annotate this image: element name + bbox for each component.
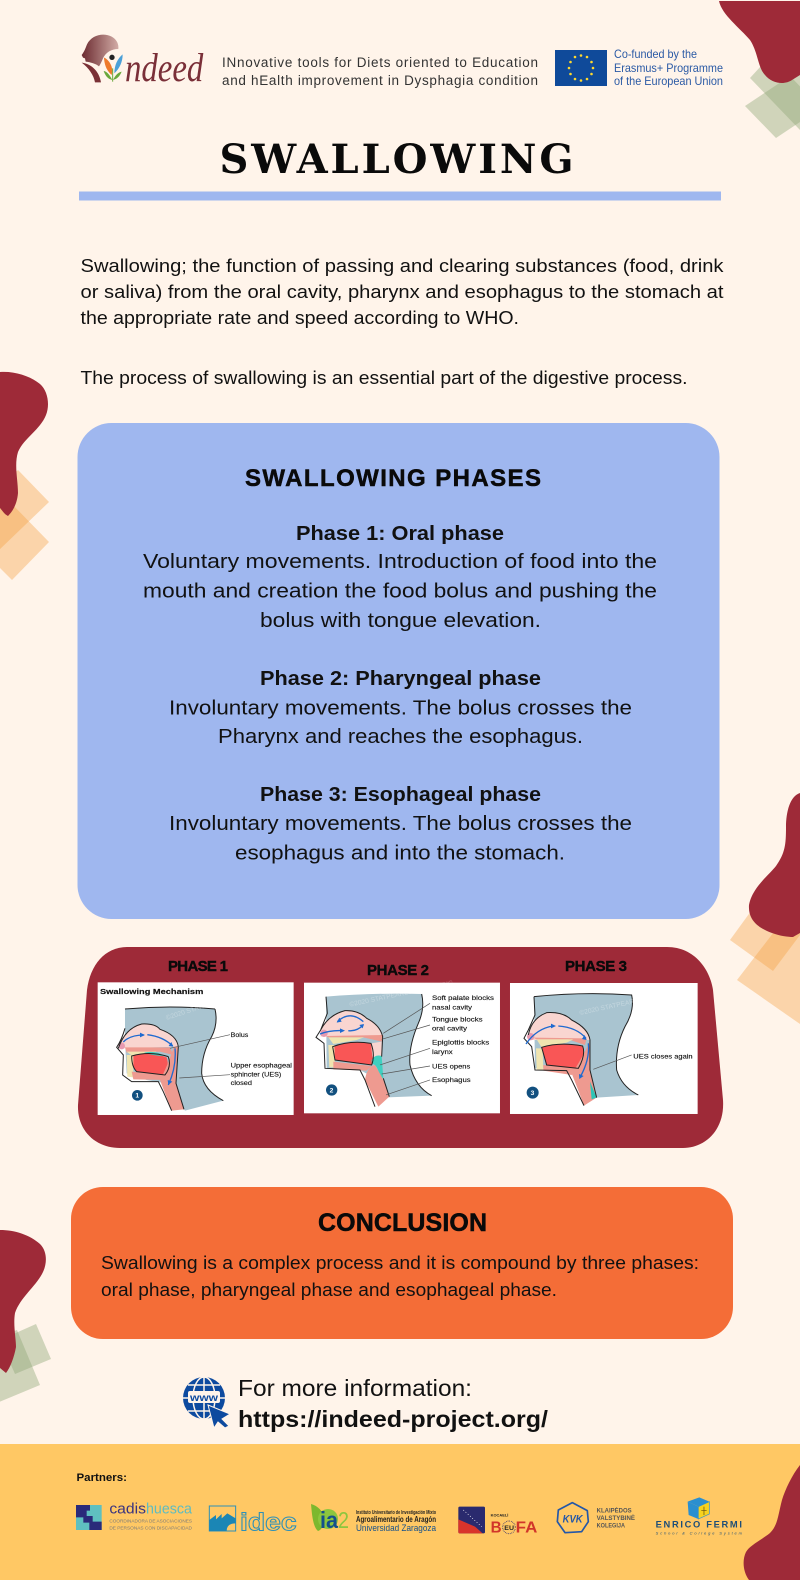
EU co-funding text (614, 47, 723, 88)
footer band (0, 1444, 800, 1580)
diagram: phase 3 swallowing mechanism: ©2020 STATPEARLS PUBLISHING (579, 987, 684, 1017)
EU co-funding text: of the European Union (614, 74, 723, 88)
partner logo: KVK (557, 1503, 635, 1533)
phase 2 text: Involuntary movements. The bolus crosses the (169, 696, 632, 720)
panel: phase illustrations (78, 947, 723, 1148)
label: phase 1: PHASE 1 (168, 958, 228, 975)
conclusion text (101, 1252, 699, 1300)
EU flag icon (555, 50, 607, 86)
partner logo: Kocaeli BEUFA: KOCAELİ (491, 1513, 508, 1518)
phase 1 text: Phase 1: Oral phase (296, 522, 504, 545)
phase 2 text: Phase 2: Pharyngeal phase (260, 667, 541, 690)
panel: conclusion (71, 1187, 733, 1339)
partner logo: KVK: KOLEGIJA (597, 1523, 626, 1529)
diagram: phase 1 swallowing mechanism: sphincter (UES) (231, 1071, 281, 1078)
phase 1 text (143, 522, 657, 632)
partner logo: cadis huesca: cadis (109, 1501, 146, 1517)
diagram: phase 2 swallowing mechanism: Esophagus (432, 1077, 471, 1084)
partner logo: Kocaeli BEUFA: EU (504, 1525, 514, 1532)
partner logo: Enrico Fermi: School & College System (656, 1531, 743, 1536)
conclusion text: Swallowing is a complex process and it is compound by three phases: (101, 1252, 699, 1273)
diagram: phase 1 swallowing mechanism: ©2020 STATPEARLS PUBLISHING (165, 982, 268, 1022)
icon: globe with cursor (183, 1377, 230, 1428)
partner logo: cadis huesca (76, 1501, 193, 1531)
more information text: https://indeed-project.org/ (238, 1406, 549, 1432)
intro text: or saliva) from the oral cavity, pharynx and esophagus to the stomach at (80, 281, 724, 302)
diagram: phase 2 swallowing mechanism: Tongue blocks (432, 1016, 483, 1023)
project tagline: INnovative tools for Diets oriented to Education (222, 55, 538, 70)
diagram: phase 1 swallowing mechanism: Swallowing Mechanism (100, 987, 204, 996)
label: phase 3: PHASE 3 (565, 958, 627, 975)
EU co-funding text: Co-funded by the (614, 47, 697, 61)
phase 1 text: mouth and creation the food bolus and pushing the (143, 580, 657, 602)
diagram: phase 2 swallowing mechanism: oral cavity (432, 1026, 468, 1033)
decoration: lower left blob and green rectangles (0, 1230, 51, 1410)
panel: swallowing phases (78, 423, 720, 919)
diagram: phase 1 swallowing mechanism (98, 982, 294, 1115)
partner logo: cadis huesca: COORDINADORA DE ASOCIACIONES (109, 1518, 192, 1523)
partner logo: KVK: KLAIPĖDOS (597, 1508, 632, 1515)
diagram: phase 2 swallowing mechanism: UES opens (432, 1064, 471, 1071)
diagram: phase 1 swallowing mechanism: closed (231, 1080, 252, 1087)
partner logo: Enrico Fermi (656, 1497, 743, 1536)
project tagline (222, 55, 538, 88)
intro text: Swallowing; the function of passing and clearing substances (food, drink (80, 255, 724, 276)
partner logo: ia2 (311, 1504, 437, 1534)
panel heading: SWALLOWING PHASES (245, 465, 541, 492)
diagram: phase 2 swallowing mechanism: larynx (432, 1049, 453, 1056)
intro text: The process of swallowing is an essential part of the digestive process. (80, 367, 688, 388)
phase 3 text (169, 783, 632, 864)
label: phase 2: PHASE 2 (367, 962, 429, 979)
phase 3 text: Phase 3: Esophageal phase (260, 783, 541, 806)
project tagline: and hEalth improvement in Dysphagia condition (222, 73, 538, 88)
diagram: phase 3 swallowing mechanism: 3 (531, 1090, 535, 1097)
partner logo: Kocaeli BEUFA: B (491, 1520, 502, 1537)
diagram: phase 1 swallowing mechanism: Bolus (231, 1032, 249, 1039)
diagram: phase 2 swallowing mechanism: 2 (330, 1087, 334, 1094)
partner logo: Kocaeli BEUFA: FA (516, 1520, 537, 1537)
partner logo: ia2: Universidad Zaragoza (356, 1523, 437, 1534)
header logo: INDEED (82, 35, 204, 90)
partner logo: Kocaeli BEUFA (458, 1507, 537, 1537)
icon: globe with cursor: www (189, 1393, 218, 1404)
phase 2 text: Pharynx and reaches the esophagus. (218, 725, 583, 748)
phase 1 text: Voluntary movements. Introduction of food into the (143, 550, 657, 573)
diagram: phase 2 swallowing mechanism: nasal cavity (432, 1004, 473, 1011)
intro text: the appropriate rate and speed according to WHO. (80, 307, 519, 328)
conclusion heading: CONCLUSION (318, 1209, 487, 1237)
partner logo: cadis huesca: DE PERSONAS CON DISCAPACIDAD (109, 1526, 193, 1531)
phase 3 text: esophagus and into the stomach. (235, 842, 565, 864)
partner logo: ia2: Instituto Universitario de Investigación Mixto (356, 1510, 436, 1516)
diagram: phase 1 swallowing mechanism: 1 (135, 1093, 139, 1100)
phase 2 text (169, 667, 632, 748)
partner logo: idec: idec (240, 1509, 297, 1537)
phase 1 text: bolus with tongue elevation. (260, 609, 541, 632)
more information text: For more information: (238, 1375, 472, 1401)
intro text (80, 255, 724, 388)
title underline bar (79, 192, 721, 200)
partner logo: KVK: KVK (563, 1513, 584, 1525)
decoration: top right blob and green diamonds (719, 1, 800, 138)
diagram: phase 2 swallowing mechanism (304, 979, 500, 1113)
more information text (238, 1375, 549, 1432)
partner logo: ia2: Agroalimentario de Aragón (356, 1514, 436, 1524)
header logo: INDEED: ndeed (125, 45, 204, 90)
partner logo: Enrico Fermi: ENRICO FERMI (656, 1519, 742, 1529)
EU co-funding text: Erasmus+ Programme (614, 61, 723, 75)
diagram: phase 2 swallowing mechanism: ©2020 STATPEARLS PUBLISHING (349, 979, 454, 1009)
decoration: left blob and orange diamonds (0, 372, 49, 580)
partner logo: ia2: 2 (338, 1507, 349, 1533)
diagram: phase 3 swallowing mechanism: UES closes again (633, 1053, 693, 1060)
diagram: phase 2 swallowing mechanism: Soft palate blocks (432, 995, 495, 1002)
partner logo: ia2: ia (320, 1507, 338, 1533)
partner logo: cadis huesca: huesca (146, 1501, 193, 1517)
phase 3 text: Involuntary movements. The bolus crosses the (169, 812, 632, 835)
partners label: Partners: (76, 1472, 127, 1484)
diagram: phase 2 swallowing mechanism: Epiglottis blocks (432, 1040, 490, 1047)
diagram: phase 1 swallowing mechanism: Upper esophageal (231, 1063, 293, 1070)
partner logo: idec (209, 1506, 297, 1537)
conclusion text: oral phase, pharyngeal phase and esophageal phase. (101, 1279, 557, 1300)
decoration: right blob and orange diamonds (730, 793, 800, 1045)
partner logo: KVK: VALSTYBINĖ (597, 1515, 635, 1522)
title: SWALLOWING (220, 136, 574, 183)
diagram: phase 3 swallowing mechanism (510, 983, 698, 1114)
